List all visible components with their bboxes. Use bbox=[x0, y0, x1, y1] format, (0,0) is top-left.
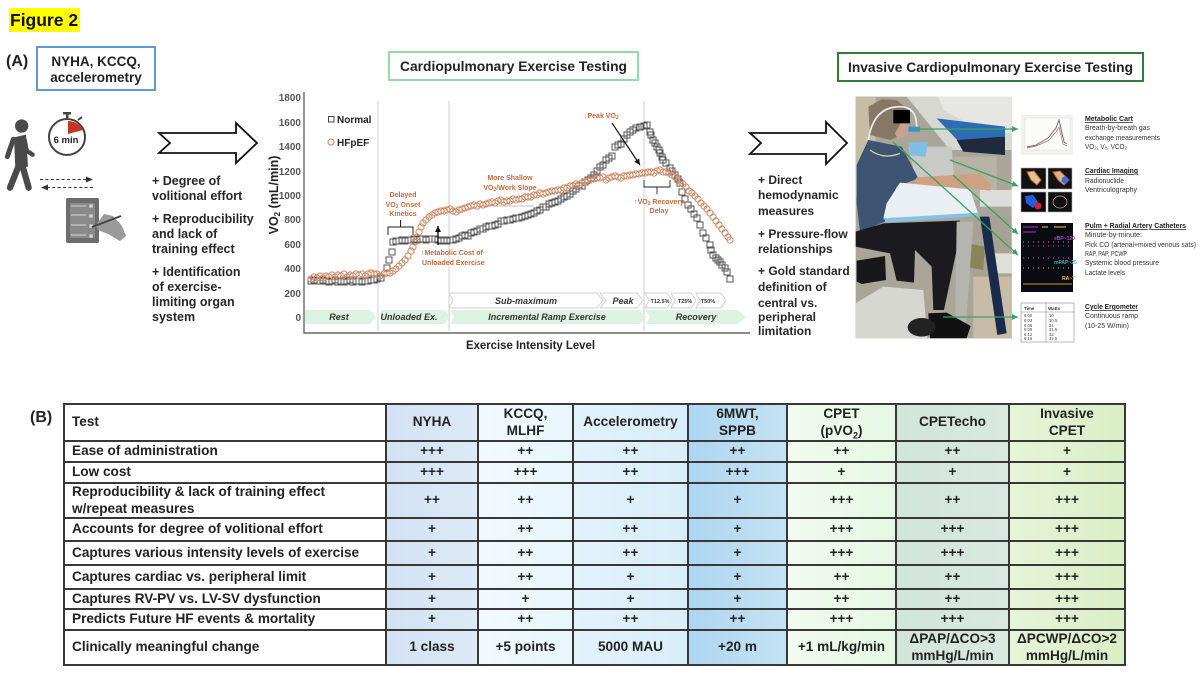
text: benefits of invasive CPET: + Direct bbox=[758, 173, 802, 187]
header row: MLHF bbox=[507, 422, 544, 438]
text: benefits of CPET: system bbox=[152, 310, 195, 324]
text: cycle ergometer: Continuous ramp bbox=[1085, 311, 1138, 320]
sub-phase labels: T50% bbox=[701, 299, 715, 305]
row: low cost: ++ bbox=[623, 464, 638, 479]
row: predicts events: ++ bbox=[730, 611, 745, 626]
header row: Invasive bbox=[1040, 406, 1094, 421]
mini table: time and watts: 30.5 bbox=[1049, 318, 1058, 323]
mini chart: metabolic cart bbox=[1021, 115, 1073, 155]
text: benefits of invasive CPET: definition of bbox=[758, 280, 828, 294]
text: metabolic cart: Breath-by-breath gas bbox=[1085, 123, 1150, 132]
row: intensity levels: +++ bbox=[941, 545, 964, 560]
row: volitional effort: +++ bbox=[941, 521, 964, 536]
row: RV-PV vs LV-SV: Captures RV-PV vs. LV-SV dysfunction bbox=[72, 591, 321, 606]
photo: patient on cycle ergometer bbox=[856, 97, 1012, 338]
row: clinically meaningful change bbox=[72, 631, 1124, 664]
icon: questionnaire and hand bbox=[66, 198, 126, 243]
y axis title: VO bbox=[267, 216, 281, 234]
sub-phase labels bbox=[495, 296, 715, 306]
y axis tick labels bbox=[279, 93, 301, 324]
row: clinically meaningful change: 5000 MAU bbox=[598, 639, 663, 654]
phase chevrons bbox=[305, 310, 746, 324]
series: Normal bbox=[311, 125, 730, 282]
text: benefits of invasive CPET: + Gold standard bbox=[758, 264, 850, 278]
text: catheters: Systemic blood pressure bbox=[1085, 258, 1159, 267]
annotation: delayed onset kinetics: Delayed bbox=[390, 192, 416, 199]
row: ease of administration: ++ bbox=[623, 443, 638, 458]
row: intensity levels bbox=[72, 542, 1124, 564]
text: cycle ergometer bbox=[1085, 302, 1138, 330]
row: cardiac vs peripheral: + bbox=[428, 569, 436, 584]
row: predicts events: +++ bbox=[941, 611, 964, 626]
row: low cost: + bbox=[949, 464, 956, 479]
annotation: recovery delay: Recovery bbox=[650, 199, 684, 206]
text: cardiac imaging: Ventriculography bbox=[1085, 185, 1137, 194]
annotation: shallow slope: /Work Slope bbox=[496, 185, 537, 192]
text: benefits of CPET: volitional effort bbox=[152, 189, 243, 203]
text: benefits of CPET: limiting organ bbox=[152, 295, 235, 309]
y axis tick labels: 200 bbox=[284, 289, 301, 300]
text: benefits of invasive CPET: hemodynamic bbox=[758, 188, 839, 202]
header row: KCCQ, bbox=[504, 406, 547, 421]
annotation: delayed onset kinetics: Onset bbox=[399, 202, 421, 209]
row: intensity levels: +++ bbox=[1055, 545, 1079, 560]
annotation: recovery delay: ↑VO bbox=[634, 199, 648, 206]
row: volitional effort: ++ bbox=[518, 521, 533, 536]
row: intensity levels: + bbox=[734, 545, 741, 560]
row: predicts events: + bbox=[428, 611, 436, 626]
row: clinically meaningful change: +20 m bbox=[718, 639, 757, 654]
row: RV-PV vs LV-SV: +++ bbox=[1055, 591, 1079, 606]
row: reproducibility: + bbox=[627, 492, 634, 507]
row: low cost: +++ bbox=[726, 464, 749, 479]
row: reproducibility bbox=[72, 484, 1124, 517]
header row: SPPB bbox=[719, 422, 756, 438]
row: reproducibility: +++ bbox=[1055, 492, 1079, 507]
mini images: cardiac imaging bbox=[1021, 168, 1072, 212]
text: benefits of invasive CPET: central vs. bbox=[758, 296, 817, 310]
header row bbox=[72, 405, 1124, 440]
row: clinically meaningful change: +1 mL/kg/min bbox=[798, 639, 885, 654]
arrow: questionnaire to CPET bbox=[159, 123, 257, 163]
header row: (pVO2) bbox=[820, 422, 863, 440]
row: reproducibility: ++ bbox=[518, 492, 533, 507]
heading box: NYHA, KCCQ, accelerometry bbox=[37, 47, 155, 90]
text: benefits of invasive CPET bbox=[758, 173, 850, 338]
row: intensity levels: +++ bbox=[830, 545, 853, 560]
text: benefits of CPET: training effect bbox=[152, 242, 235, 256]
row: RV-PV vs LV-SV bbox=[72, 590, 1124, 608]
annotation: delayed onset kinetics bbox=[386, 192, 421, 235]
text: benefits of CPET: and lack of bbox=[152, 227, 218, 241]
text: metabolic cart: exchange measurements bbox=[1085, 133, 1160, 142]
row: predicts events: Predicts Future HF events & mortality bbox=[72, 611, 315, 626]
header row: CPET bbox=[1049, 422, 1085, 438]
row: ease of administration: ++ bbox=[834, 443, 849, 458]
y axis title: (mL/min) bbox=[267, 156, 281, 212]
row: reproducibility: Reproducibility & lack of training effect bbox=[72, 484, 325, 499]
mini table: time and watts: 6:09 bbox=[1024, 327, 1033, 332]
mini table: time and watts: Time bbox=[1024, 306, 1035, 311]
text: benefits of invasive CPET: limitation bbox=[758, 324, 811, 338]
header row: CPET bbox=[823, 406, 860, 421]
row: clinically meaningful change: Clinically meaningful change bbox=[72, 639, 259, 654]
row: volitional effort: + bbox=[428, 521, 436, 536]
text: benefits of CPET bbox=[152, 174, 254, 324]
sub-phase labels: Peak bbox=[612, 296, 634, 306]
annotation: recovery delay: 2 bbox=[648, 201, 651, 207]
heading box: Cardiopulmonary Exercise Testing bbox=[389, 52, 638, 80]
upper section: panel A bbox=[4, 8, 1196, 352]
phase labels: Incremental Ramp Exercise bbox=[488, 312, 606, 322]
header row: CPETecho bbox=[919, 414, 986, 429]
row: low cost: +++ bbox=[420, 464, 444, 479]
legend bbox=[328, 115, 372, 149]
annotation: peak VO2: 2 bbox=[616, 115, 619, 121]
annotation: metabolic cost of unloaded exercise bbox=[421, 226, 485, 267]
header row: NYHA bbox=[413, 414, 451, 429]
annotation: peak VO2 bbox=[584, 113, 640, 165]
heading box: Invasive Cardiopulmonary Exercise Testing: Invasive Cardiopulmonary Exercise Testing bbox=[848, 59, 1133, 75]
row: clinically meaningful change: +5 points bbox=[495, 639, 556, 654]
text: metabolic cart: Metabolic Cart bbox=[1085, 114, 1133, 123]
row: intensity levels: + bbox=[428, 545, 436, 560]
heading box: Invasive Cardiopulmonary Exercise Testing bbox=[838, 53, 1143, 81]
series: HFpEF bbox=[311, 170, 730, 279]
header row: Test bbox=[72, 414, 99, 429]
row: clinically meaningful change: mmHg/L/min bbox=[911, 648, 994, 662]
panel label B: (B) bbox=[30, 409, 52, 426]
row: ease of administration: ++ bbox=[518, 443, 533, 458]
row: cardiac vs peripheral: ++ bbox=[834, 569, 849, 584]
text: catheters: Minute-by-minute: bbox=[1085, 230, 1142, 239]
phase labels: Unloaded Ex. bbox=[380, 312, 438, 322]
text: catheters: Lactate levels bbox=[1085, 268, 1125, 277]
text: benefits of invasive CPET: peripheral bbox=[758, 310, 816, 324]
text: catheters: RAP, PAP, PCWP bbox=[1085, 249, 1127, 258]
row: predicts events: +++ bbox=[830, 611, 853, 626]
y axis title: 2 bbox=[273, 211, 282, 216]
row: clinically meaningful change: ΔPCWP/ΔCO>2 bbox=[1017, 631, 1117, 646]
mini image: hemodynamic monitor: mPAP~25 bbox=[1054, 260, 1077, 266]
row: volitional effort: + bbox=[734, 521, 741, 536]
text: cycle ergometer: (10-25 W/min) bbox=[1085, 321, 1129, 330]
row: ease of administration: + bbox=[1063, 443, 1071, 458]
figure title: Figure 2 bbox=[10, 10, 78, 30]
annotation: delayed onset kinetics: 2 bbox=[396, 204, 399, 210]
row: intensity levels: ++ bbox=[518, 545, 533, 560]
mini table: time and watts: Watts bbox=[1048, 306, 1061, 311]
text: catheters bbox=[1085, 221, 1196, 277]
annotation: delayed onset kinetics: VO bbox=[386, 202, 396, 209]
mini image: hemodynamic monitor bbox=[1021, 223, 1077, 292]
row: low cost: +++ bbox=[514, 464, 537, 479]
row: volitional effort: Accounts for degree of volitional effort bbox=[72, 521, 323, 536]
sub-phase labels: Sub-maximum bbox=[495, 296, 557, 306]
y axis tick labels: 1400 bbox=[279, 142, 301, 153]
row: cardiac vs peripheral: +++ bbox=[1055, 569, 1079, 584]
annotation: shallow slope: VO bbox=[483, 185, 494, 192]
row: intensity levels: ++ bbox=[623, 545, 638, 560]
y axis tick labels: 1600 bbox=[279, 118, 301, 129]
chart: VO2 versus exercise intensity bbox=[267, 92, 750, 352]
row: reproducibility: + bbox=[734, 492, 741, 507]
heading box: NYHA, KCCQ, accelerometry: NYHA, KCCQ, bbox=[51, 54, 141, 69]
mini table: time and watts bbox=[1021, 303, 1074, 342]
legend: Normal bbox=[337, 115, 372, 126]
y axis tick labels: 400 bbox=[284, 264, 301, 275]
panel label A: (A) bbox=[6, 53, 28, 70]
text: benefits of invasive CPET: measures bbox=[758, 204, 814, 218]
y axis tick labels: 1800 bbox=[279, 93, 301, 104]
text: cardiac imaging: Cardiac Imaging bbox=[1085, 166, 1138, 175]
mini table: time and watts: 31.5 bbox=[1049, 327, 1058, 332]
row: reproducibility: +++ bbox=[830, 492, 853, 507]
row: ease of administration: Ease of administration bbox=[72, 443, 218, 458]
row: predicts events: ++ bbox=[518, 611, 533, 626]
text: benefits of CPET: + Identification bbox=[152, 265, 241, 279]
row: intensity levels: Captures various intensity levels of exercise bbox=[72, 545, 359, 560]
arrow: CPET to invasive CPET bbox=[750, 122, 847, 164]
y axis tick labels: 1200 bbox=[279, 167, 301, 178]
row: predicts events: ++ bbox=[623, 611, 638, 626]
text: metabolic cart bbox=[1085, 114, 1160, 151]
row: volitional effort: ++ bbox=[623, 521, 638, 536]
phase labels bbox=[329, 312, 717, 322]
text: benefits of CPET: + Reproducibility bbox=[152, 212, 254, 226]
row: cardiac vs peripheral: + bbox=[627, 569, 634, 584]
phase labels: Recovery bbox=[676, 312, 717, 322]
y axis tick labels: 0 bbox=[295, 313, 301, 324]
mini table: time and watts: 6:15 bbox=[1024, 336, 1033, 341]
icon: six minute stopwatch: 6 min bbox=[54, 135, 79, 146]
row: RV-PV vs LV-SV: + bbox=[734, 591, 741, 606]
row: ease of administration: ++ bbox=[730, 443, 745, 458]
mini table: time and watts: 32 bbox=[1049, 332, 1054, 337]
sub-phase labels: T12.5% bbox=[651, 299, 670, 305]
x axis title: Exercise Intensity Level bbox=[466, 338, 595, 352]
header row: 6MWT, bbox=[716, 406, 759, 421]
mini table: time and watts: 30 bbox=[1049, 313, 1054, 318]
row: volitional effort: +++ bbox=[830, 521, 853, 536]
row: reproducibility: w/repeat measures bbox=[72, 500, 194, 516]
row: predicts events bbox=[72, 610, 1124, 629]
mini table: time and watts: 6:00 bbox=[1024, 313, 1033, 318]
annotation: recovery delay: Delay bbox=[650, 208, 668, 215]
axes bbox=[304, 92, 750, 333]
row: low cost: Low cost bbox=[72, 464, 131, 479]
comparison table bbox=[63, 403, 1126, 666]
text: metabolic cart: VO₂, Vₑ, VCO₂ bbox=[1085, 142, 1127, 151]
legend: HFpEF bbox=[337, 138, 369, 149]
row: clinically meaningful change: ΔPAP/ΔCO>3 bbox=[909, 631, 996, 646]
text: benefits of CPET: + Degree of bbox=[152, 174, 221, 188]
row: ease of administration: +++ bbox=[420, 443, 444, 458]
annotation: shallow slope bbox=[483, 175, 537, 193]
icon: six minute stopwatch bbox=[49, 112, 85, 155]
icon: dashed back and forth arrows bbox=[40, 180, 93, 188]
row: ease of administration: ++ bbox=[945, 443, 960, 458]
row: volitional effort bbox=[72, 519, 1124, 540]
text: cardiac imaging: Radionuclide bbox=[1085, 176, 1124, 185]
text: cardiac imaging bbox=[1085, 166, 1138, 194]
y axis tick labels: 600 bbox=[284, 240, 301, 251]
header row: Accelerometry bbox=[583, 414, 678, 429]
mini image: hemodynamic monitor: sBP~120 bbox=[1054, 236, 1075, 242]
text: benefits of invasive CPET: + Pressure-flow bbox=[758, 227, 848, 241]
row: low cost bbox=[72, 463, 1124, 482]
icon: walking person bbox=[7, 119, 33, 188]
row: low cost: + bbox=[1063, 464, 1071, 479]
text: catheters: Pulm + Radial Artery Catheters bbox=[1085, 221, 1186, 230]
mini table: time and watts: 6:06 bbox=[1024, 323, 1033, 328]
phase divider lines bbox=[378, 101, 644, 331]
annotation: shallow slope: More Shallow bbox=[487, 175, 533, 182]
row: ease of administration bbox=[72, 442, 1124, 461]
row: RV-PV vs LV-SV: + bbox=[627, 591, 634, 606]
y axis tick labels: 800 bbox=[284, 215, 301, 226]
mini table: time and watts: 32.5 bbox=[1049, 336, 1058, 341]
text: benefits of invasive CPET: relationships bbox=[758, 242, 833, 256]
mini image: hemodynamic monitor: RA~7 bbox=[1062, 276, 1075, 282]
annotation: shallow slope: 2 bbox=[494, 187, 497, 193]
row: cardiac vs peripheral: ++ bbox=[945, 569, 960, 584]
row: RV-PV vs LV-SV: + bbox=[522, 591, 529, 606]
row: low cost: + bbox=[838, 464, 845, 479]
annotation: recovery delay bbox=[634, 180, 684, 215]
row: cardiac vs peripheral bbox=[72, 566, 1124, 588]
mini table: time and watts: 31 bbox=[1049, 323, 1054, 328]
arrows: green connectors from photo to data panels bbox=[893, 129, 1018, 317]
row: clinically meaningful change: 1 class bbox=[409, 639, 455, 654]
slope reference line bbox=[477, 206, 533, 207]
row: volitional effort: +++ bbox=[1055, 521, 1079, 536]
heading box: Cardiopulmonary Exercise Testing: Cardiopulmonary Exercise Testing bbox=[400, 58, 627, 74]
text: benefits of CPET: of exercise- bbox=[152, 280, 221, 294]
row: reproducibility: ++ bbox=[424, 492, 440, 507]
mini table: time and watts: 6:03 bbox=[1024, 318, 1033, 323]
y axis tick labels: 1000 bbox=[279, 191, 301, 202]
text: cycle ergometer: Cycle Ergometer bbox=[1085, 302, 1138, 311]
row: predicts events: +++ bbox=[1055, 611, 1079, 626]
row: clinically meaningful change: mmHg/L/min bbox=[1026, 648, 1108, 662]
row: cardiac vs peripheral: Captures cardiac vs. peripheral limit bbox=[72, 569, 306, 584]
row: RV-PV vs LV-SV: + bbox=[428, 591, 436, 606]
sub-phase chevrons bbox=[449, 293, 726, 308]
row: cardiac vs peripheral: ++ bbox=[518, 569, 533, 584]
annotation: metabolic cost of unloaded exercise: Unloaded Exercise bbox=[422, 260, 485, 267]
mini table: time and watts: 6:12 bbox=[1024, 332, 1033, 337]
heading box: NYHA, KCCQ, accelerometry: accelerometry bbox=[50, 70, 142, 85]
annotation: delayed onset kinetics: Kinetics bbox=[389, 211, 417, 218]
annotation: metabolic cost of unloaded exercise: ↑Metabolic Cost of bbox=[421, 250, 484, 257]
phase labels: Rest bbox=[329, 312, 350, 322]
row: RV-PV vs LV-SV: ++ bbox=[945, 591, 960, 606]
row: RV-PV vs LV-SV: ++ bbox=[834, 591, 849, 606]
row: reproducibility: ++ bbox=[945, 492, 960, 507]
row: cardiac vs peripheral: + bbox=[734, 569, 741, 584]
sub-phase labels: T25% bbox=[678, 299, 692, 305]
annotation: peak VO2: ↓Peak VO bbox=[584, 113, 616, 120]
